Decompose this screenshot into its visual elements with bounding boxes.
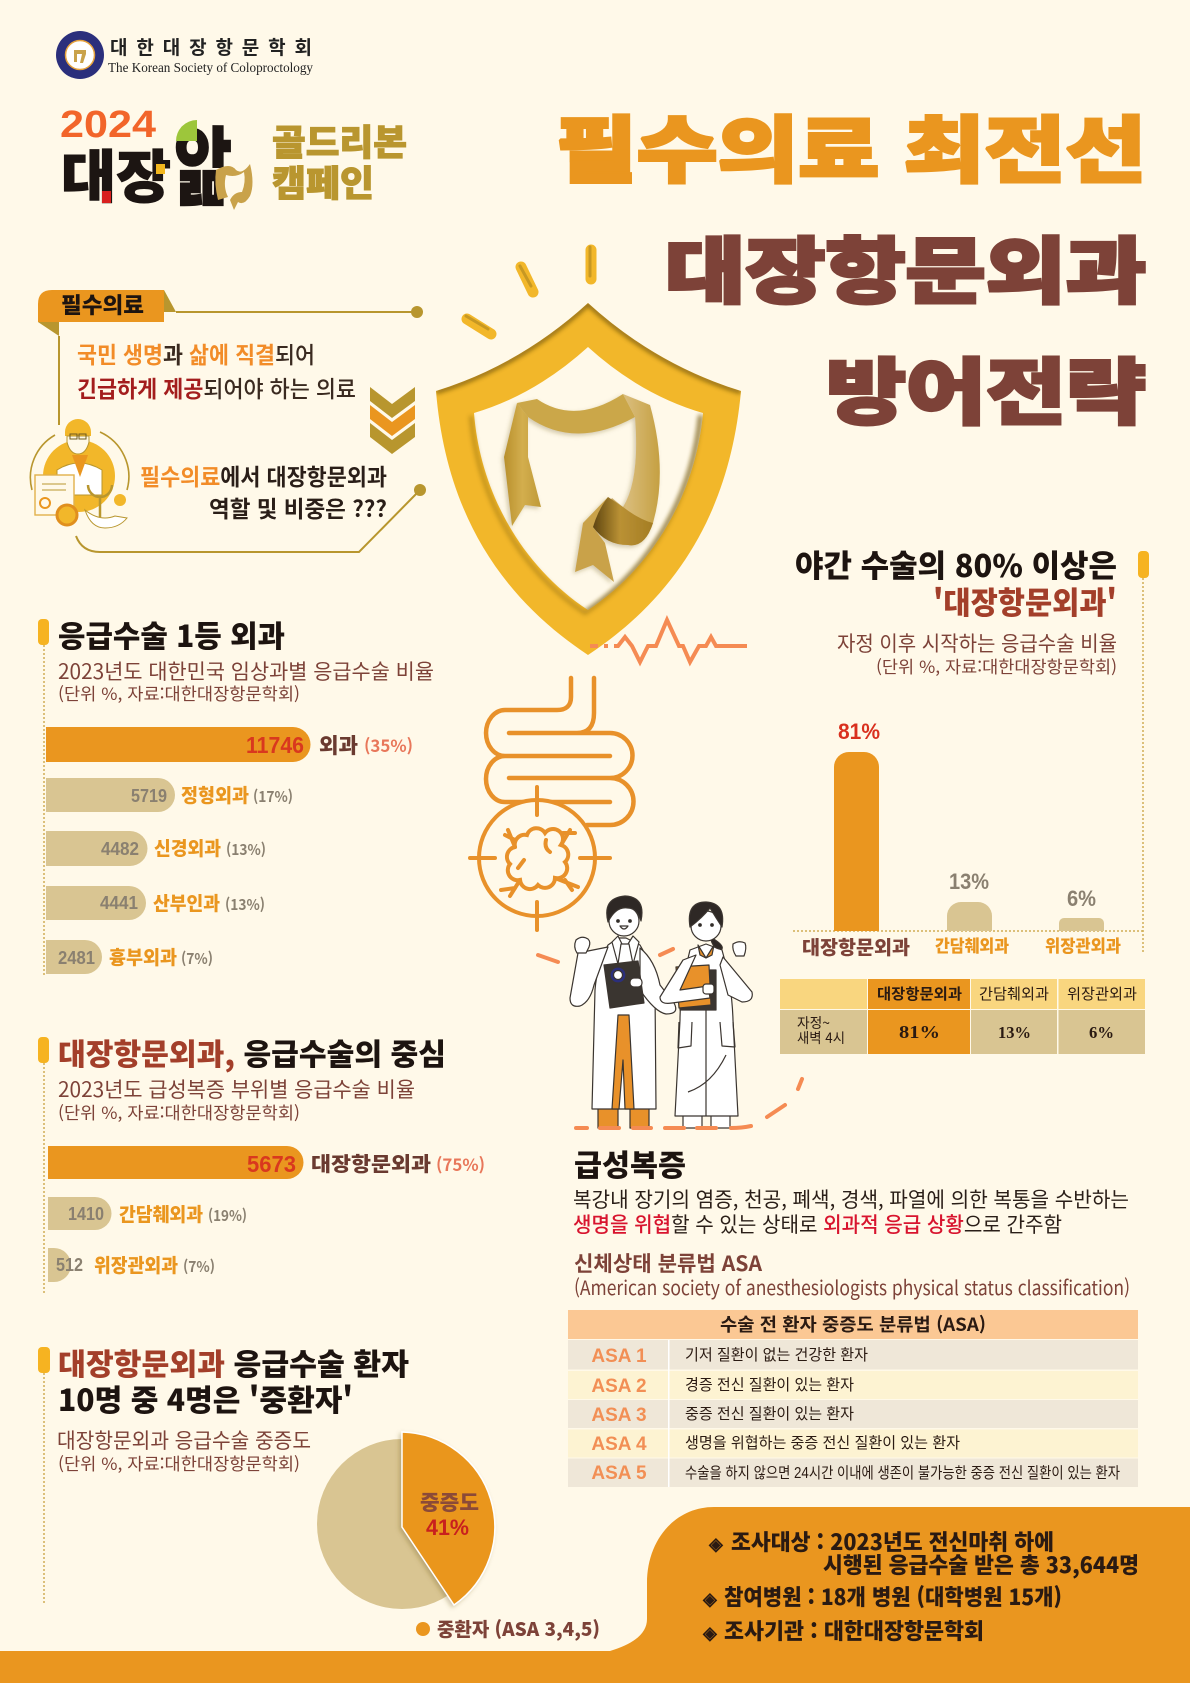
definition text bbox=[77, 336, 356, 404]
ASA subtitle: 신체상태 분류법 ASA bbox=[574, 1248, 763, 1278]
definition text: 국민 생명과 삶에 직결되어 bbox=[77, 336, 315, 370]
heading: 10명 중 4명은 '중환자' bbox=[58, 1376, 353, 1420]
heading: 자정 이후 시작하는 응급수술 비율 bbox=[837, 628, 1117, 658]
data table: night surgery: 6% bbox=[1089, 1023, 1114, 1042]
bar chart: departments: 2481 bbox=[58, 948, 95, 968]
heading: (단위 %, 자료:대한대장항문학회) bbox=[58, 1450, 300, 1475]
bar chart: departments: (35%) bbox=[364, 732, 413, 757]
table: ASA classification: 수술 전 환자 중증도 분류법 (ASA) bbox=[720, 1311, 986, 1337]
bar chart: abdominal sites: 512 bbox=[56, 1255, 83, 1275]
bar chart: departments: (13%) bbox=[226, 839, 266, 860]
bar chart: abdominal sites: 간담췌외과 bbox=[119, 1200, 203, 1227]
panel: top surgery departments bbox=[38, 612, 434, 977]
bar chart: departments: (13%) bbox=[225, 894, 265, 915]
survey text: ◈ bbox=[702, 1619, 718, 1645]
heading: 2023년도 대한민국 임상과별 응급수술 비율 bbox=[58, 656, 434, 686]
bar chart: night surgery: 6% bbox=[1067, 886, 1096, 911]
data table: night surgery: 대장항문외과 bbox=[877, 983, 962, 1004]
main title: 방어전략 bbox=[826, 334, 1146, 439]
data table: night surgery: 81% bbox=[899, 1022, 940, 1042]
bar chart: departments bbox=[46, 727, 413, 974]
panel: colorectal surgery center of emergency bbox=[38, 1030, 485, 1294]
ASA subtitle bbox=[574, 1248, 1130, 1301]
question text: 필수의료에서 대장항문외과 bbox=[140, 458, 387, 492]
campaign logo: 앎 bbox=[174, 101, 232, 223]
tag: essential medicine: 필수의료 bbox=[61, 288, 144, 320]
pie chart: 41% bbox=[426, 1515, 469, 1540]
survey text: ◈ bbox=[708, 1530, 724, 1556]
heading: 대장항문외과 응급수술 환자 bbox=[58, 1340, 409, 1384]
heading bbox=[795, 541, 1117, 678]
data table: night surgery: 간담췌외과 bbox=[979, 983, 1049, 1004]
heading bbox=[57, 1340, 409, 1475]
data table: night surgery: 13% bbox=[998, 1023, 1031, 1042]
survey text: 조사기관 : 대한대장항문학회 bbox=[724, 1614, 984, 1646]
bar chart: abdominal sites: (19%) bbox=[208, 1205, 247, 1226]
bar chart: departments: 5719 bbox=[131, 786, 167, 806]
campaign logo bbox=[60, 101, 252, 223]
icon: small gold ribbon bbox=[215, 164, 252, 210]
society logo and name bbox=[56, 31, 313, 79]
table: ASA classification: 수술을 하지 않으면 24시간 이내에 생존이 불가능한 중증 전신 질환이 있는 환자 bbox=[685, 1464, 1120, 1482]
definition text: 긴급하게 제공되어야 하는 의료 bbox=[77, 370, 356, 404]
campaign name: 골드리본 bbox=[272, 114, 407, 166]
section marker bbox=[38, 1037, 49, 1063]
campaign logo: 대장 bbox=[61, 132, 171, 214]
table: ASA classification: 기저 질환이 없는 건강한 환자 bbox=[685, 1346, 868, 1364]
bar chart: abdominal sites bbox=[48, 1146, 485, 1282]
description: 생명을 위협할 수 있는 상태로 외과적 응급 상황으로 간주함 bbox=[573, 1209, 1062, 1239]
bar chart: night surgery: 위장관외과 bbox=[1045, 932, 1121, 957]
bar chart: night surgery: 81% bbox=[838, 719, 880, 744]
bar chart: abdominal sites: 1410 bbox=[68, 1204, 104, 1224]
main title: 필수의료 최전선 bbox=[556, 92, 1146, 197]
woman doctor bbox=[660, 902, 752, 1128]
bar chart: departments: 산부인과 bbox=[153, 889, 220, 916]
bar chart: departments: 신경외과 bbox=[154, 834, 221, 861]
campaign logo: 2024 bbox=[60, 104, 156, 146]
data table: night surgery bbox=[780, 979, 1145, 1054]
pie chart: 중증도 bbox=[420, 1487, 479, 1517]
heading: (단위 %, 자료:대한대장항문학회) bbox=[876, 653, 1117, 678]
survey text: 조사대상 : 2023년도 전신마취 하에 bbox=[731, 1525, 1054, 1557]
pie chart bbox=[317, 1432, 495, 1609]
campaign name: 캠페인 bbox=[272, 155, 374, 207]
icon: heartbeat line bbox=[590, 620, 747, 662]
panel: night surgery bbox=[780, 541, 1149, 1054]
bar chart: departments: 외과 bbox=[319, 730, 358, 760]
campaign name bbox=[272, 114, 407, 207]
bar chart: night surgery bbox=[802, 719, 1121, 960]
section marker bbox=[1138, 551, 1149, 578]
panel: acute abdomen bbox=[568, 1141, 1138, 1487]
legend: 중환자 (ASA 3,4,5) bbox=[437, 1615, 600, 1642]
table: ASA classification: ASA 5 bbox=[591, 1463, 647, 1484]
icon: chevrons bbox=[370, 387, 415, 454]
bar chart: departments: 4482 bbox=[101, 839, 139, 859]
society logo and name: The Korean Society of Coloproctology bbox=[108, 60, 313, 75]
question text bbox=[140, 458, 387, 524]
bar chart: night surgery: 간담췌외과 bbox=[935, 932, 1009, 957]
bar chart: abdominal sites: (75%) bbox=[436, 1151, 485, 1176]
main title: 대장항문외과 bbox=[665, 213, 1146, 318]
main title bbox=[556, 92, 1146, 439]
description: 복강내 장기의 염증, 천공, 폐색, 경색, 파열에 의한 복통을 수반하는 bbox=[573, 1184, 1129, 1214]
table: ASA classification: ASA 1 bbox=[591, 1346, 647, 1367]
icon: intestine bbox=[486, 678, 633, 825]
data table: night surgery: 위장관외과 bbox=[1067, 983, 1137, 1004]
section marker bbox=[38, 619, 49, 645]
heading: (단위 %, 자료:대한대장항문학회) bbox=[58, 680, 300, 705]
icon: tumor target bbox=[470, 787, 610, 930]
panel: survey info footer bbox=[0, 1507, 1190, 1683]
heading bbox=[58, 1030, 446, 1124]
section marker bbox=[38, 1347, 50, 1373]
bar chart: departments: 11746 bbox=[246, 732, 304, 758]
heading: (단위 %, 자료:대한대장항문학회) bbox=[58, 1099, 300, 1124]
heading bbox=[58, 612, 434, 705]
man doctor bbox=[570, 896, 676, 1128]
heading: 대장항문외과 응급수술 중증도 bbox=[57, 1425, 311, 1455]
description bbox=[573, 1184, 1129, 1239]
panel: severe patients bbox=[38, 1340, 600, 1642]
bar chart: abdominal sites: 대장항문외과 bbox=[311, 1148, 431, 1177]
bar chart: departments: (17%) bbox=[253, 786, 293, 807]
bar chart: departments: 흉부외과 bbox=[109, 943, 178, 970]
panel: essential medicine definition bbox=[30, 288, 426, 552]
heading: 대장항문외과, 응급수술의 중심 bbox=[58, 1030, 446, 1074]
icon: doctor bbox=[30, 419, 129, 528]
table: ASA classification: 경증 전신 질환이 있는 환자 bbox=[685, 1376, 854, 1394]
table: ASA classification: 중증 전신 질환이 있는 환자 bbox=[685, 1405, 854, 1423]
table: ASA classification: ASA 3 bbox=[591, 1405, 647, 1426]
illustration: two doctors bbox=[570, 896, 752, 1128]
table: ASA classification: ASA 4 bbox=[591, 1434, 647, 1455]
survey text: 시행된 응급수술 받은 총 33,644명 bbox=[823, 1548, 1139, 1580]
heading: 야간 수술의 80% 이상은 bbox=[795, 541, 1117, 586]
icon: colon ribbon bbox=[504, 394, 660, 582]
bar chart: departments: 4441 bbox=[100, 893, 138, 913]
heading: '대장항문외과' bbox=[933, 578, 1117, 623]
data table: night surgery: 새벽 4시 bbox=[797, 1028, 845, 1048]
bar chart: night surgery: 대장항문외과 bbox=[802, 933, 911, 960]
survey text: ◈ bbox=[702, 1585, 718, 1611]
bar chart: abdominal sites: 5673 bbox=[247, 1151, 296, 1177]
bar chart: abdominal sites: 위장관외과 bbox=[94, 1251, 178, 1278]
survey text bbox=[702, 1525, 1139, 1646]
table: ASA classification bbox=[568, 1310, 1138, 1487]
table: ASA classification: 생명을 위협하는 중증 전신 질환이 있는 환자 bbox=[685, 1434, 960, 1452]
icon: rays bbox=[466, 247, 591, 334]
bar chart: departments: 정형외과 bbox=[181, 781, 250, 808]
tag: essential medicine bbox=[38, 288, 176, 336]
question text: 역할 및 비중은 ??? bbox=[209, 490, 387, 524]
decorative arc: dashed orange bbox=[538, 949, 802, 1128]
bar chart: departments: (7%) bbox=[181, 948, 213, 969]
icon: shield with rays bbox=[436, 247, 741, 655]
heading: 급성복증 bbox=[574, 1141, 686, 1185]
society logo and name: 대한대장항문학회 bbox=[110, 33, 312, 60]
bar chart: abdominal sites: (7%) bbox=[183, 1256, 215, 1277]
data table: night surgery: 자정~ bbox=[797, 1013, 830, 1033]
bar chart: night surgery: 13% bbox=[949, 869, 989, 894]
icon: society seal bbox=[56, 31, 104, 79]
heading: 2023년도 급성복증 부위별 응급수술 비율 bbox=[58, 1074, 415, 1104]
heading: 응급수술 1등 외과 bbox=[58, 612, 285, 656]
table: ASA classification: ASA 2 bbox=[591, 1376, 647, 1397]
survey text: 참여병원 : 18개 병원 (대학병원 15개) bbox=[724, 1580, 1062, 1612]
